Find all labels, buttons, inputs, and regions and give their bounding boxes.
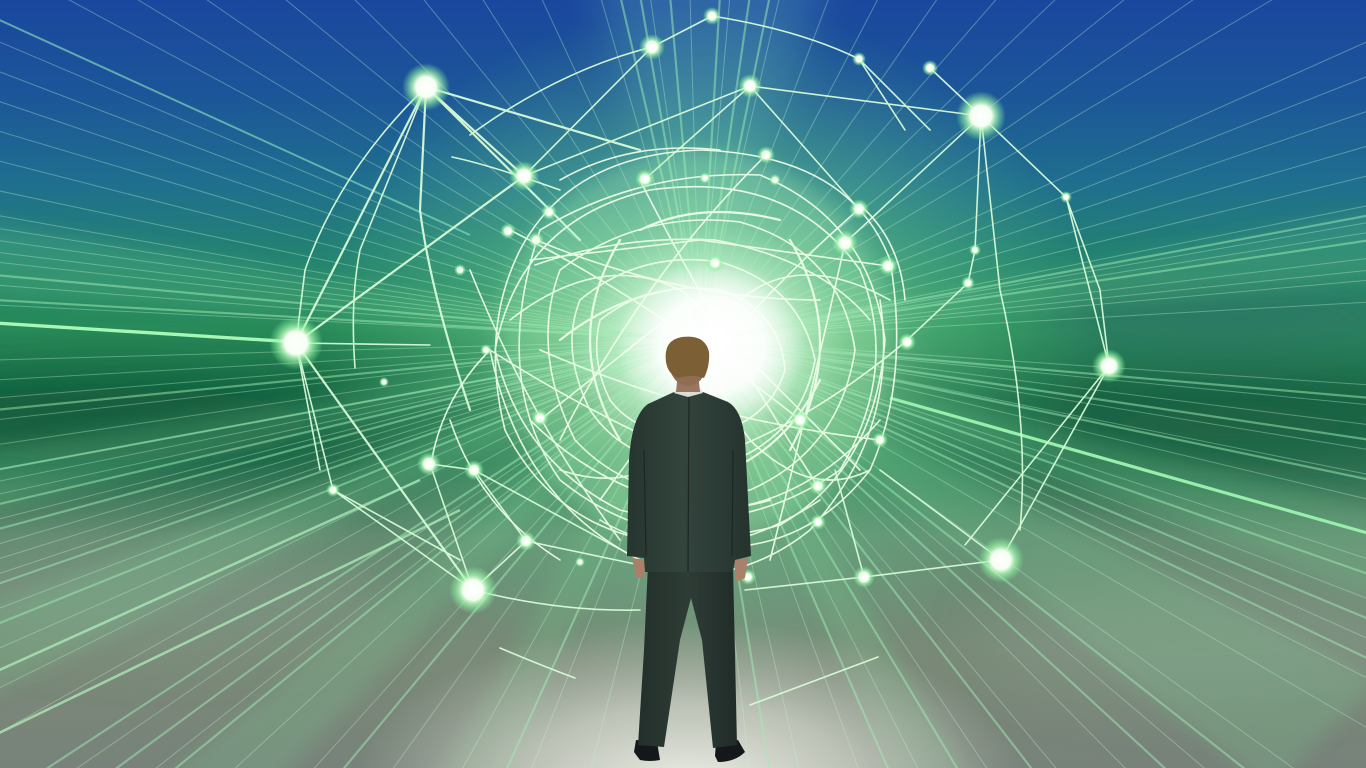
right hand bbox=[734, 558, 748, 582]
small glowing nodes bbox=[326, 7, 1072, 588]
jacket seam bbox=[644, 395, 733, 572]
bright ray: far right bbox=[890, 398, 1366, 534]
network: inner swirl bbox=[430, 148, 905, 575]
floor glow bbox=[300, 600, 1100, 768]
neck bbox=[676, 372, 700, 392]
head bbox=[669, 338, 707, 386]
man seen from behind bbox=[627, 337, 751, 762]
wide soft light wedges bbox=[0, 210, 1366, 768]
network: glow under swirl bbox=[500, 150, 890, 540]
network: outer connections bbox=[296, 16, 1109, 705]
large glowing nodes bbox=[269, 63, 1126, 614]
bright ray: far left bbox=[0, 323, 296, 342]
trousers bbox=[638, 565, 737, 748]
hair bbox=[666, 337, 709, 378]
right shoe bbox=[715, 740, 745, 762]
central white core bbox=[617, 260, 807, 430]
bright ray: upper left bbox=[0, 18, 470, 235]
left shoe bbox=[634, 740, 660, 761]
soft top-centre light bbox=[590, 0, 830, 340]
mist bands bbox=[0, 285, 1366, 700]
left hand bbox=[632, 558, 646, 578]
bright ray: lower left bbox=[0, 480, 460, 735]
jacket bbox=[627, 392, 751, 572]
collar bbox=[674, 388, 703, 397]
